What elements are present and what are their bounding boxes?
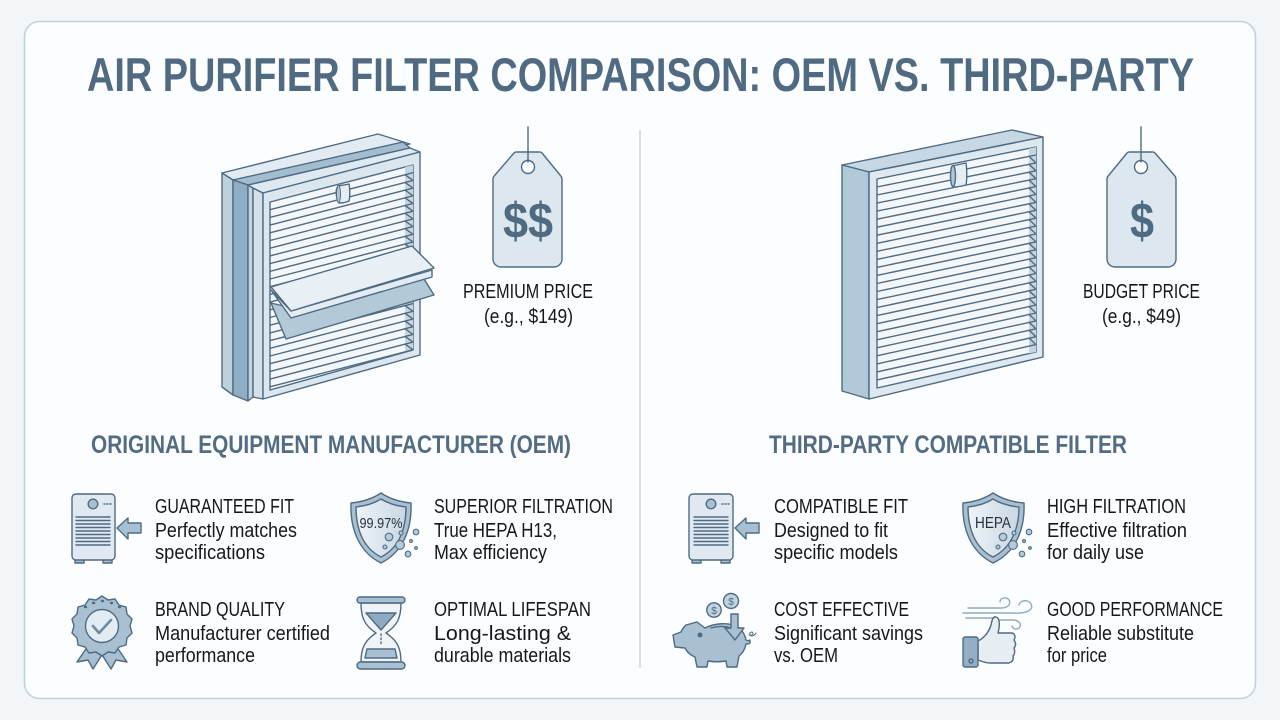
budget price label: BUDGET PRICE xyxy=(1083,281,1200,303)
icon: hourglass xyxy=(357,597,405,669)
icon: piggy bank with coins xyxy=(673,594,756,667)
text: vs. OEM xyxy=(774,645,838,667)
icon: shield HEPA xyxy=(963,493,1032,563)
heading: OEM: ORIGINAL EQUIPMENT MANUFACTURER (OEM) xyxy=(91,431,571,459)
text xyxy=(774,599,923,667)
text xyxy=(774,496,908,564)
feature: optimal lifespan xyxy=(357,597,591,669)
feature: high filtration xyxy=(963,493,1187,564)
budget price label: (e.g., $49) xyxy=(1102,306,1181,328)
feature: good performance xyxy=(963,598,1223,667)
text xyxy=(1047,496,1187,564)
icon: rosette badge xyxy=(72,596,132,669)
budget price label xyxy=(1083,281,1200,328)
icon: premium price tag: $$ xyxy=(503,193,553,249)
text: for price xyxy=(1047,645,1107,667)
text xyxy=(434,599,591,667)
premium price label xyxy=(463,281,593,328)
icon: thumbs up with wind xyxy=(963,598,1032,667)
illustration: third-party filter xyxy=(842,130,1043,399)
text: GUARANTEED FIT xyxy=(155,496,294,518)
heading: third-party: THIRD-PARTY COMPATIBLE FILTER xyxy=(769,431,1127,459)
text: COST EFFECTIVE xyxy=(774,599,909,621)
text: BRAND QUALITY xyxy=(155,599,285,621)
text: specifications xyxy=(155,542,265,564)
icon: budget price tag xyxy=(1107,127,1176,267)
text: performance xyxy=(155,645,255,667)
text: Perfectly matches xyxy=(155,520,297,542)
text xyxy=(434,496,613,564)
icon: air purifier with arrow xyxy=(689,494,759,563)
center divider xyxy=(639,130,641,668)
illustration: OEM filter with pleats pulled open xyxy=(222,134,434,401)
text: Max efficiency xyxy=(434,542,547,564)
feature: compatible fit xyxy=(689,494,908,564)
icon: piggy bank with coins: $ xyxy=(728,597,734,608)
text: GOOD PERFORMANCE xyxy=(1047,599,1223,621)
text: Manufacturer certified xyxy=(155,623,330,645)
feature: cost effective xyxy=(673,594,923,667)
panel: OEM column xyxy=(72,127,613,669)
text: specific models xyxy=(774,542,898,564)
icon: shield HEPA: HEPA xyxy=(975,515,1011,532)
feature: brand quality xyxy=(72,596,330,669)
text: Designed to fit xyxy=(774,520,888,542)
text: COMPATIBLE FIT xyxy=(774,496,908,518)
text: for daily use xyxy=(1047,542,1144,564)
icon: piggy bank with coins: $ xyxy=(711,606,717,617)
text xyxy=(155,496,297,564)
feature: superior filtration xyxy=(351,493,613,564)
text: Reliable substitute xyxy=(1047,623,1194,645)
panel: third-party column xyxy=(673,127,1223,667)
icon: budget price tag: $ xyxy=(1130,193,1154,249)
text: durable materials xyxy=(434,645,571,667)
premium price label: PREMIUM PRICE xyxy=(463,281,593,303)
text: HIGH FILTRATION xyxy=(1047,496,1186,518)
text xyxy=(155,599,330,667)
feature: guaranteed fit xyxy=(72,494,297,564)
icon: shield 99.97%: 99.97% xyxy=(360,515,402,532)
text: Long-lasting & xyxy=(434,623,572,645)
icon: shield 99.97% xyxy=(351,493,419,563)
text: True HEPA H13, xyxy=(434,520,557,542)
text xyxy=(1047,599,1223,667)
icon: premium price tag xyxy=(493,127,562,267)
text: Effective filtration xyxy=(1047,520,1187,542)
icon: air purifier with arrow xyxy=(72,494,141,563)
text: Significant savings xyxy=(774,623,923,645)
text: SUPERIOR FILTRATION xyxy=(434,496,613,518)
premium price label: (e.g., $149) xyxy=(484,306,573,328)
text: OPTIMAL LIFESPAN xyxy=(434,599,591,621)
